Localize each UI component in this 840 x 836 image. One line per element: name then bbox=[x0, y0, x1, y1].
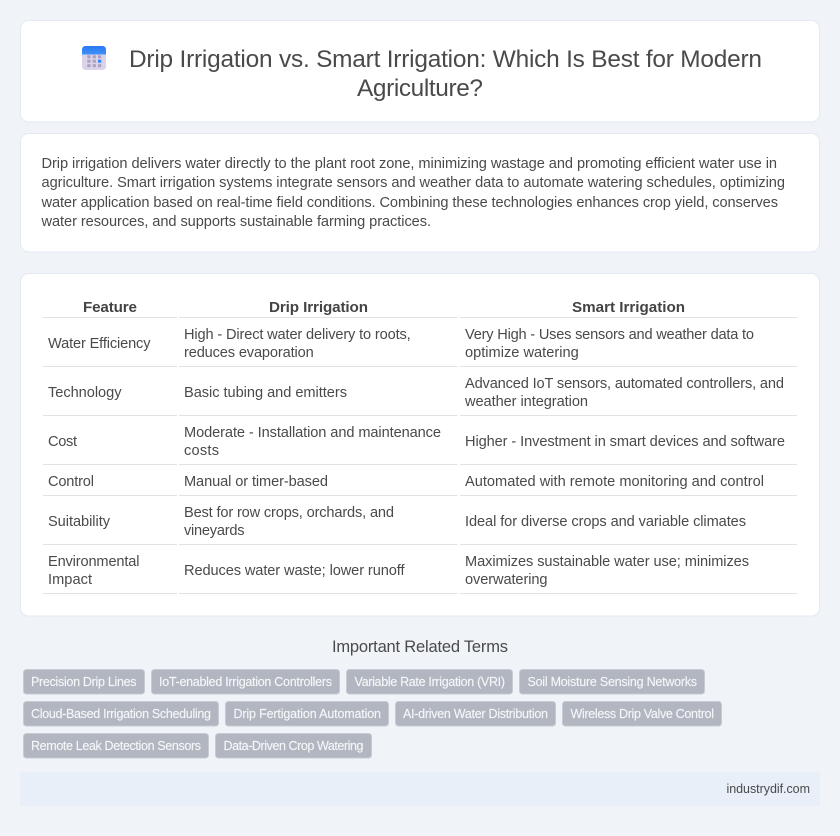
tag: IoT-enabled Irrigation Controllers bbox=[159, 675, 332, 689]
intro text block: water application based on real-time field conditions. Combining these technologies enhances crop yield, conserves bbox=[40, 195, 778, 211]
row: suitability: Best for row crops, orchards, and bbox=[184, 505, 394, 521]
tag: Variable Rate Irrigation (VRI) bbox=[354, 675, 505, 689]
row: suitability: Suitability bbox=[48, 514, 111, 530]
tag: Soil Moisture Sensing Networks bbox=[528, 675, 697, 689]
title bbox=[129, 46, 762, 102]
row: environmental impact bbox=[43, 554, 797, 594]
table header row: Feature bbox=[83, 299, 137, 316]
tag bbox=[24, 702, 218, 726]
footer bar bbox=[20, 772, 820, 806]
tag: Drip Fertigation Automation bbox=[234, 707, 381, 721]
row: cost bbox=[43, 425, 797, 464]
tag bbox=[24, 734, 208, 758]
row: cost: Cost bbox=[48, 434, 77, 450]
row: water efficiency bbox=[43, 327, 797, 366]
row: water efficiency: Very High - Uses sensors and weather data to bbox=[465, 327, 754, 343]
tag bbox=[152, 670, 340, 694]
intro text block bbox=[40, 156, 785, 230]
row: control: Automated with remote monitoring and control bbox=[465, 474, 764, 490]
row: technology: Technology bbox=[48, 385, 122, 401]
intro text block: water resources, and supports sustainable farming practices. bbox=[40, 214, 431, 230]
table header row: Smart Irrigation bbox=[572, 299, 685, 316]
tag: Precision Drip Lines bbox=[31, 675, 136, 689]
footer source text: industrydif.com bbox=[726, 782, 810, 796]
tag: Remote Leak Detection Sensors bbox=[31, 739, 201, 753]
row: technology bbox=[43, 376, 797, 416]
tag: Cloud-Based Irrigation Scheduling bbox=[31, 707, 211, 721]
tag bbox=[520, 670, 704, 694]
tag: AI-driven Water Distribution bbox=[403, 707, 548, 721]
row: water efficiency: High - Direct water delivery to roots, bbox=[184, 327, 411, 343]
tag: Data-Driven Crop Watering bbox=[224, 739, 364, 753]
tag: Wireless Drip Valve Control bbox=[570, 707, 714, 721]
heading: important related terms: Important Related Terms bbox=[332, 638, 508, 656]
row: water efficiency: reduces evaporation bbox=[184, 345, 314, 361]
tag bbox=[24, 670, 144, 694]
row: water efficiency: optimize watering bbox=[465, 345, 579, 361]
table header row bbox=[43, 299, 797, 318]
row: suitability: vineyards bbox=[184, 523, 244, 539]
row: environmental impact: overwatering bbox=[465, 572, 548, 588]
row: technology: Advanced IoT sensors, automated controllers, and bbox=[465, 376, 784, 392]
icon: calendar bbox=[82, 46, 106, 70]
row: environmental impact: Maximizes sustainable water use; minimizes bbox=[465, 554, 749, 570]
tag bbox=[216, 734, 372, 758]
tag bbox=[562, 702, 722, 726]
row: suitability: Ideal for diverse crops and variable climates bbox=[465, 514, 746, 530]
table header row: Drip Irrigation bbox=[269, 299, 368, 316]
row: control bbox=[43, 474, 797, 496]
tag bbox=[226, 702, 388, 726]
intro text block: Drip irrigation delivers water directly to the plant root zone, minimizing wastage and promoting efficient water use in bbox=[42, 156, 777, 172]
panel: title card bbox=[20, 20, 820, 122]
row: cost: costs bbox=[184, 443, 219, 459]
title: Drip Irrigation vs. Smart Irrigation: Which Is Best for Modern bbox=[129, 46, 762, 73]
panel: introduction bbox=[20, 134, 820, 252]
row: environmental impact: Reduces water waste; lower runoff bbox=[184, 563, 405, 579]
panel: related term tags bbox=[24, 670, 722, 758]
intro text block: agriculture. Smart irrigation systems integrate sensors and weather data to automate watering schedules, optimizing bbox=[42, 175, 785, 191]
row: control: Control bbox=[48, 474, 94, 490]
tag bbox=[346, 670, 512, 694]
row: technology: Basic tubing and emitters bbox=[184, 385, 347, 401]
row: cost: Higher - Investment in smart devices and software bbox=[465, 434, 785, 450]
panel: comparison table bbox=[20, 274, 820, 616]
title: Agriculture? bbox=[357, 75, 483, 102]
row: water efficiency: Water Efficiency bbox=[48, 336, 151, 352]
row: cost: Moderate - Installation and maintenance bbox=[184, 425, 441, 441]
row: technology: weather integration bbox=[464, 394, 588, 410]
row: suitability bbox=[43, 505, 797, 544]
row: control: Manual or timer-based bbox=[184, 474, 328, 490]
row: environmental impact: Impact bbox=[48, 572, 92, 588]
row: environmental impact: Environmental bbox=[48, 554, 140, 570]
tag bbox=[396, 702, 556, 726]
